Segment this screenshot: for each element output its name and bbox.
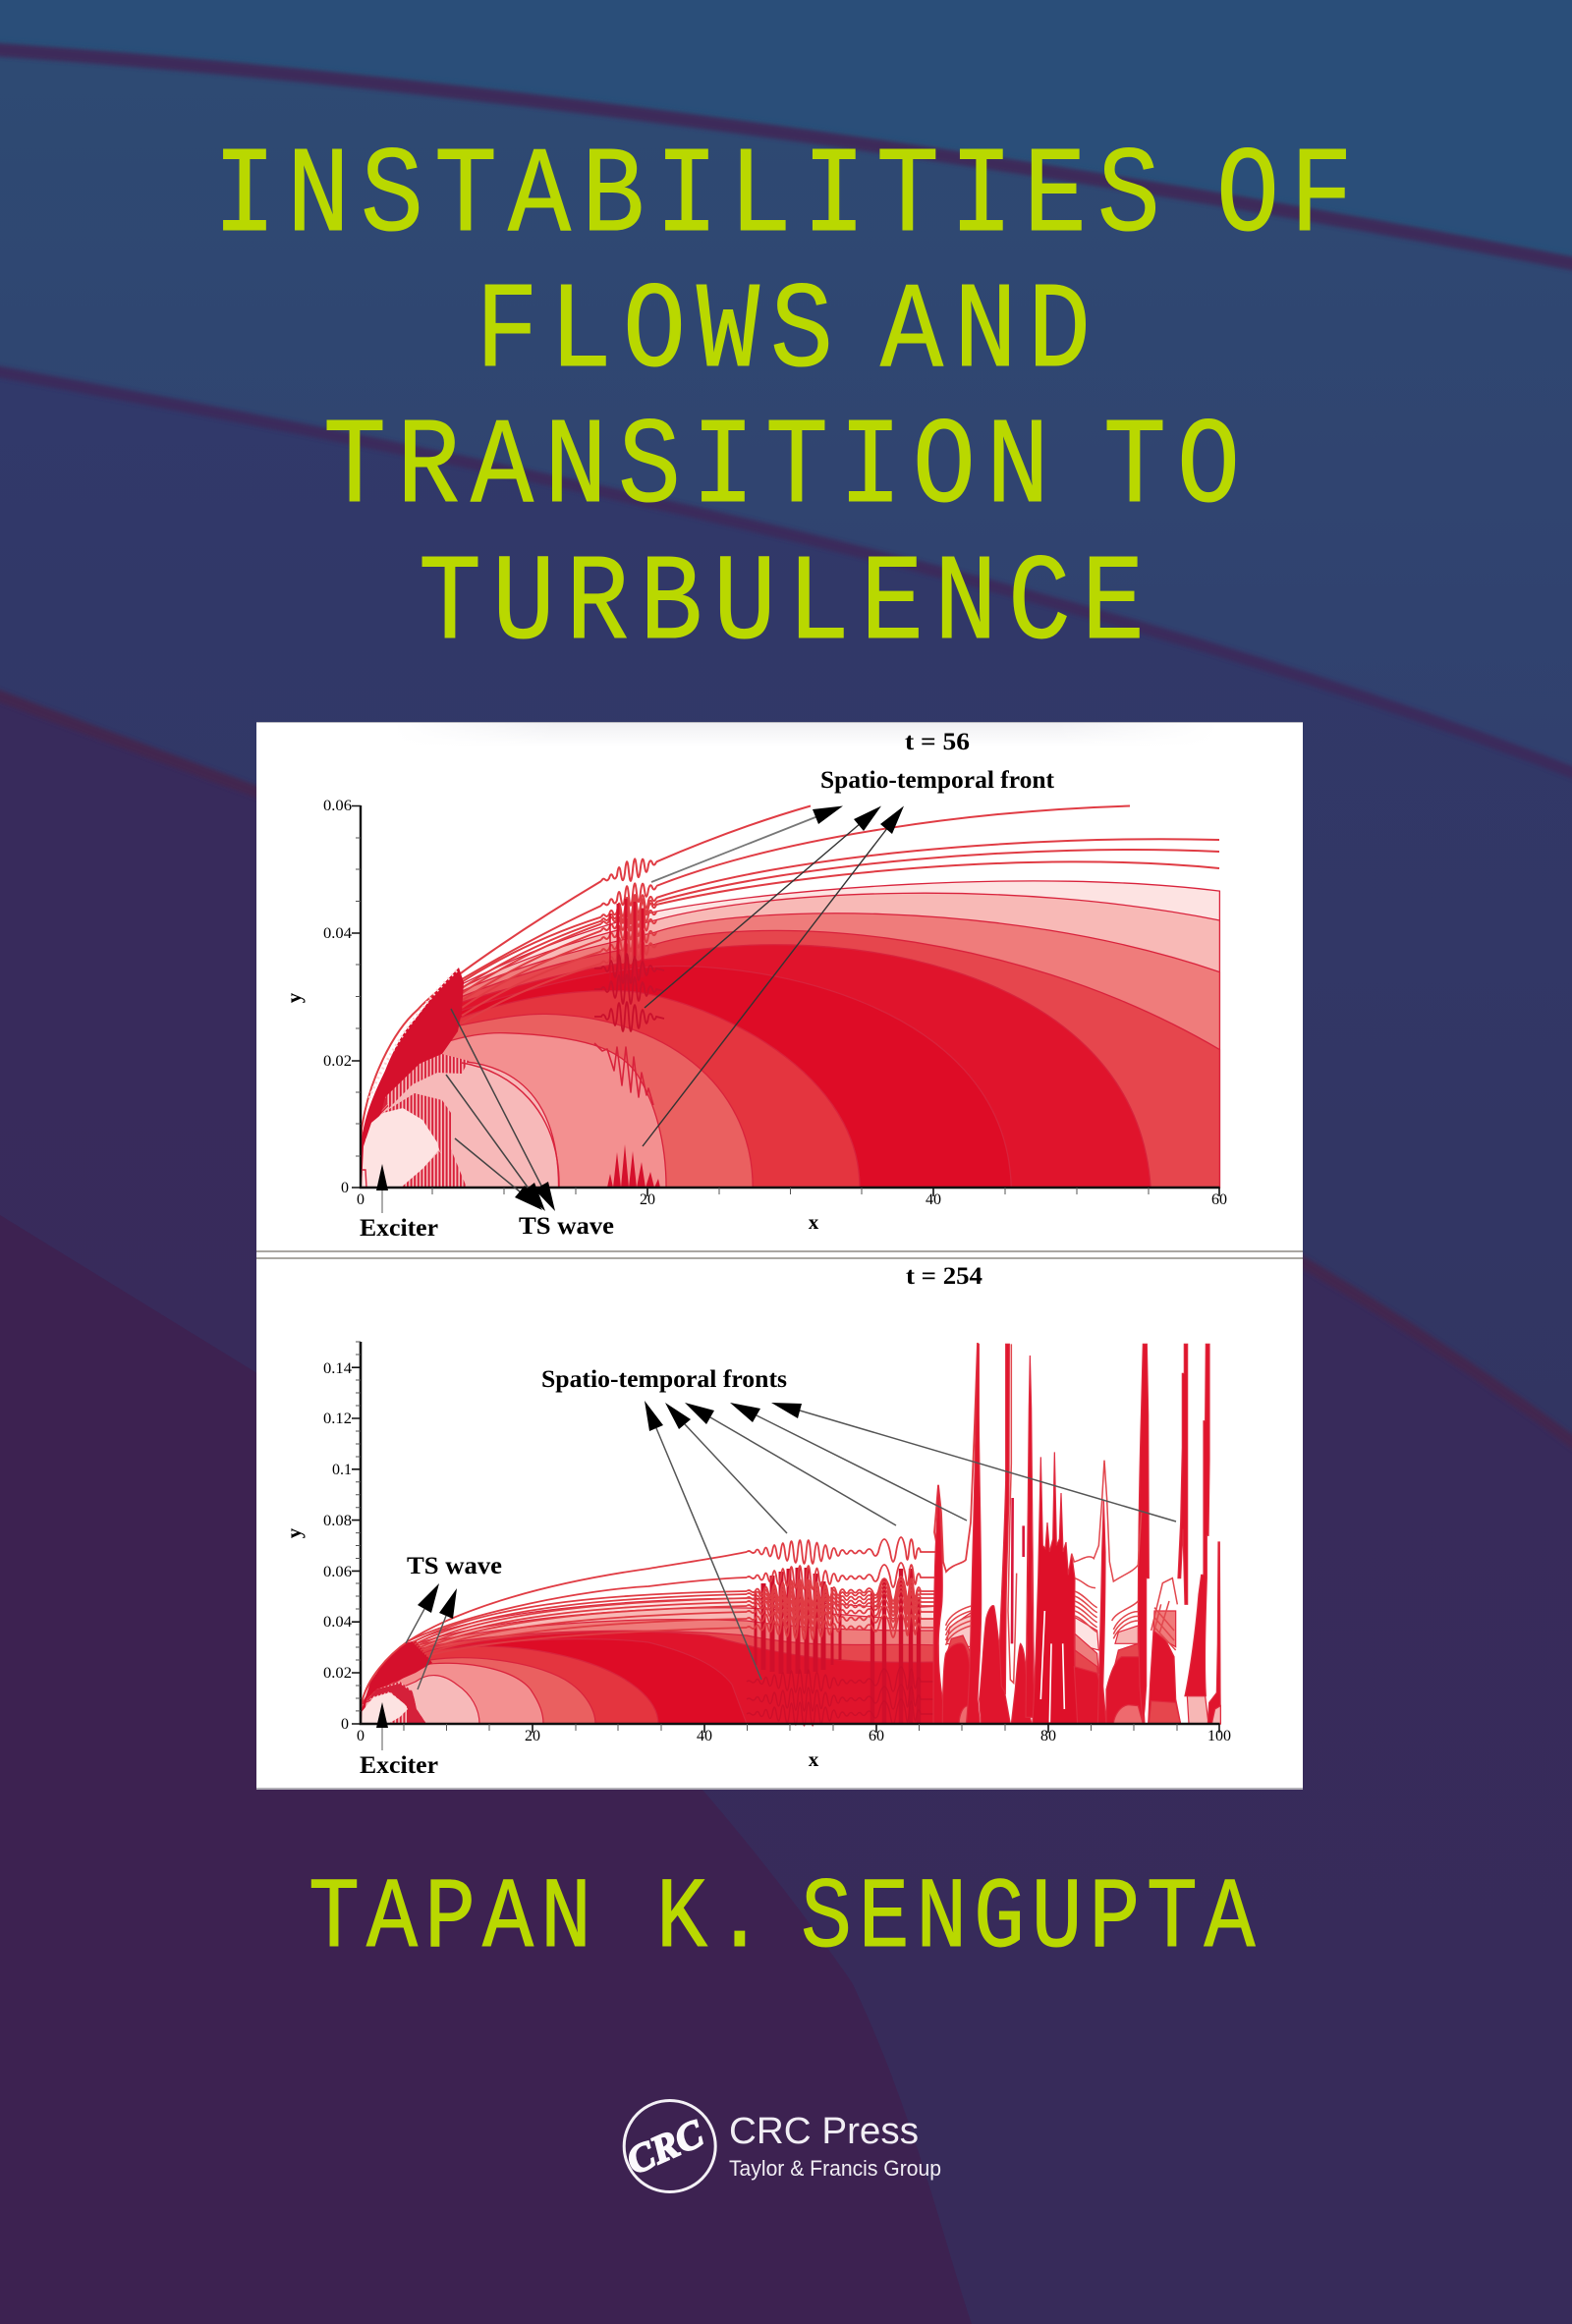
axis tick labels: 0.12 [323, 1411, 352, 1427]
axis tick labels: 20 [640, 1191, 655, 1208]
axis tick labels: 40 [697, 1728, 712, 1744]
figure panels backdrop [256, 722, 1303, 1790]
axis titles [282, 992, 819, 1234]
axis titles: x [809, 1210, 819, 1234]
chart: t = 56 contour plot [282, 729, 1227, 1242]
leading-edge dark band and bubble [361, 1640, 432, 1724]
axis tick labels: 0.02 [323, 1053, 352, 1070]
title: TRANSITION [323, 400, 1060, 538]
axes and ticks [352, 805, 1220, 1196]
spatio-temporal front annotation [643, 767, 1055, 1146]
title [213, 129, 1364, 675]
axis tick labels: 40 [926, 1191, 941, 1208]
axis titles: y [282, 1527, 306, 1538]
spatio-temporal fronts annotation: Spatio-temporal fronts [541, 1366, 787, 1393]
axis tick labels: 100 [1207, 1728, 1231, 1744]
logo roundel: CRC [620, 2110, 710, 2184]
title: TURBULENCE [419, 536, 1155, 675]
TS wave annotation [406, 1553, 502, 1689]
exciter annotation [360, 1702, 438, 1779]
title: OF [1216, 129, 1364, 267]
TS wave annotation [446, 1009, 614, 1240]
time label: t = 254 [906, 1263, 983, 1290]
axes and ticks [352, 1342, 1220, 1733]
spatio-temporal fronts annotation [541, 1366, 1176, 1680]
axis tick labels [323, 1360, 1231, 1744]
exciter annotation [360, 1164, 438, 1242]
turbulent spikes region [933, 1344, 1220, 1724]
title: TO [1103, 400, 1251, 538]
wave packet at x = 20 [594, 899, 664, 1188]
axis tick labels: 0 [341, 1180, 349, 1196]
author name [309, 1863, 1262, 1976]
author name: SENGUPTA [801, 1863, 1262, 1976]
exciter annotation: Exciter [360, 1752, 438, 1779]
axis tick labels: 0.02 [323, 1665, 352, 1682]
author name: TAPAN K. [309, 1863, 772, 1976]
axis tick labels: 80 [1040, 1728, 1056, 1744]
axis titles [282, 1527, 819, 1771]
axis tick labels [323, 798, 1227, 1208]
axis tick labels: 0.14 [323, 1360, 352, 1377]
axis tick labels: 0.06 [323, 1564, 352, 1580]
time label: t = 56 [905, 729, 970, 755]
publisher name: CRC Press [729, 2111, 919, 2152]
contour fill layers, laminar region [361, 1598, 938, 1724]
contour fill layers [361, 881, 1219, 1188]
title: AND [880, 264, 1101, 403]
vertical wave streaks [747, 1568, 938, 1726]
publisher logo [620, 2100, 941, 2192]
axis tick labels: 0.04 [323, 925, 352, 942]
axis tick labels: 0.08 [323, 1513, 352, 1529]
outer contour lines [361, 805, 1219, 1188]
title: FLOWS [476, 264, 844, 403]
publisher group: Taylor & Francis Group [729, 2156, 941, 2181]
axis tick labels: 0 [357, 1728, 365, 1744]
spatio-temporal front annotation: Spatio-temporal front [820, 767, 1055, 794]
axis tick labels: 0.06 [323, 798, 352, 814]
axis tick labels: 0 [357, 1191, 365, 1208]
axis tick labels: 0 [341, 1716, 349, 1733]
axis tick labels: 60 [1211, 1191, 1227, 1208]
exciter annotation: Exciter [360, 1215, 438, 1242]
axis tick labels: 0.04 [323, 1614, 352, 1631]
TS wave annotation: TS wave [519, 1213, 614, 1240]
oscillating contour lines [361, 1343, 978, 1724]
axis tick labels: 60 [869, 1728, 884, 1744]
axis tick labels: 0.1 [332, 1462, 352, 1478]
axis tick labels: 20 [525, 1728, 540, 1744]
leading-edge dark band [361, 968, 559, 1188]
TS wave annotation: TS wave [407, 1553, 502, 1579]
title: INSTABILITIES [213, 129, 1171, 267]
axis titles: y [282, 992, 306, 1003]
axis titles: x [809, 1747, 819, 1771]
chart: t = 254 contour plot [282, 1263, 1231, 1779]
